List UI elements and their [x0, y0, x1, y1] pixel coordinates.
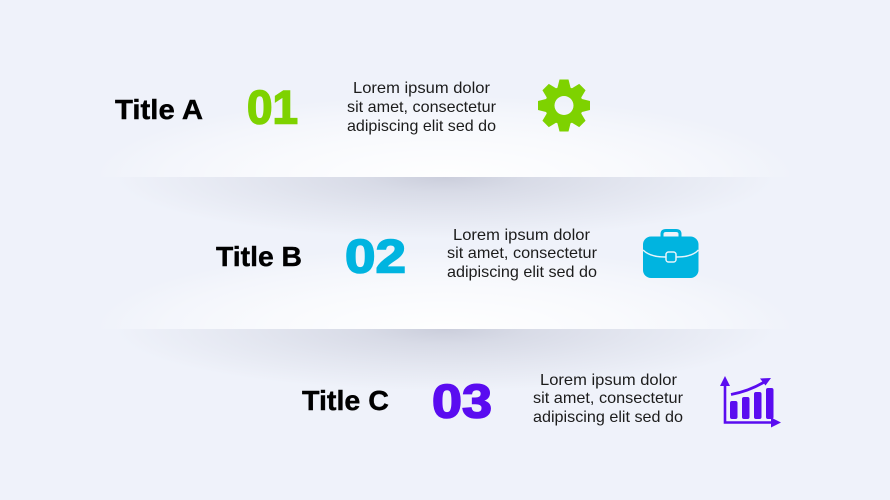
row B: [216, 227, 698, 282]
text block A: [347, 80, 497, 135]
heading: Title A: Title A: [115, 94, 203, 125]
text block B: [447, 227, 598, 281]
row A: [115, 80, 590, 135]
text block C: [533, 372, 684, 426]
text block B: Lorem ipsum dolor: [453, 227, 591, 244]
heading: Title B: Title B: [216, 241, 302, 272]
icon: briefcase: [643, 230, 698, 278]
text block A: adipiscing elit sed do: [347, 118, 496, 135]
text block A: Lorem ipsum dolor: [353, 80, 491, 97]
panel: divider B: [93, 247, 797, 391]
text block A: sit amet, consectetur: [347, 99, 497, 116]
icon: gear: [538, 80, 590, 132]
text block B: adipiscing elit sed do: [447, 264, 597, 281]
number 02: 02: [345, 230, 406, 282]
number 01: 01: [247, 80, 298, 134]
text block C: Lorem ipsum dolor: [540, 372, 678, 389]
text block C: adipiscing elit sed do: [533, 409, 683, 426]
panel: divider A: [93, 95, 797, 239]
text block C: sit amet, consectetur: [533, 390, 684, 407]
number 03: 03: [432, 374, 492, 428]
heading: Title C: Title C: [302, 385, 389, 416]
text block B: sit amet, consectetur: [447, 245, 598, 262]
row C: [302, 372, 781, 428]
icon: bar chart: [720, 376, 781, 428]
